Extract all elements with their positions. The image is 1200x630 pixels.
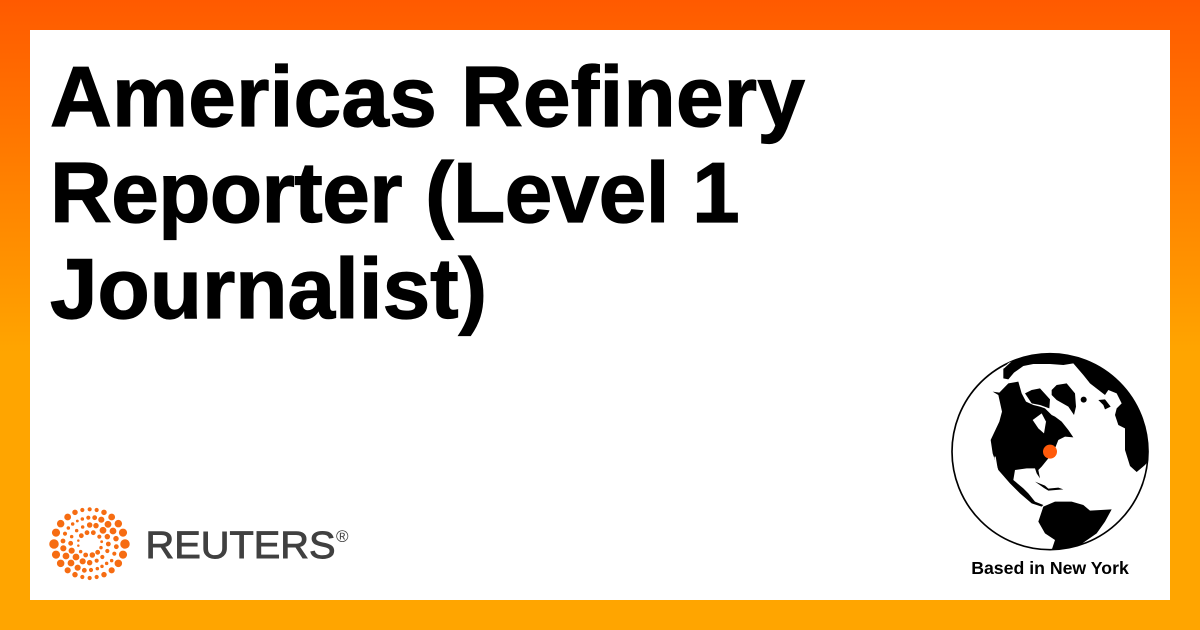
caption: Based in New York <box>971 558 1129 578</box>
globe outline <box>952 354 1148 550</box>
Arctic islands <box>1025 388 1050 408</box>
British Isles <box>1098 399 1111 409</box>
Baja sliver <box>995 457 997 471</box>
title: Reporter (Level 1 <box>50 146 739 241</box>
title: Americas Refinery <box>50 50 805 145</box>
title <box>50 50 806 337</box>
Iceland <box>1081 397 1087 403</box>
icon: globe with New York marker <box>951 352 1149 550</box>
Hudson Bay <box>1033 413 1046 433</box>
polar sliver <box>1003 361 1012 369</box>
wordmark: REUTERS <box>146 525 336 567</box>
icon: Reuters dot ring <box>50 508 129 580</box>
marker: New York <box>1043 445 1057 459</box>
North America <box>991 382 1073 507</box>
South America <box>1038 502 1112 550</box>
registered mark: ® <box>336 527 349 546</box>
logo: Reuters <box>49 507 349 580</box>
Cuba <box>1035 482 1063 491</box>
Arctic and Eurasia rim <box>1003 354 1148 472</box>
land masses <box>990 354 1148 549</box>
Greenland <box>1052 383 1076 415</box>
title: Journalist) <box>50 242 487 337</box>
